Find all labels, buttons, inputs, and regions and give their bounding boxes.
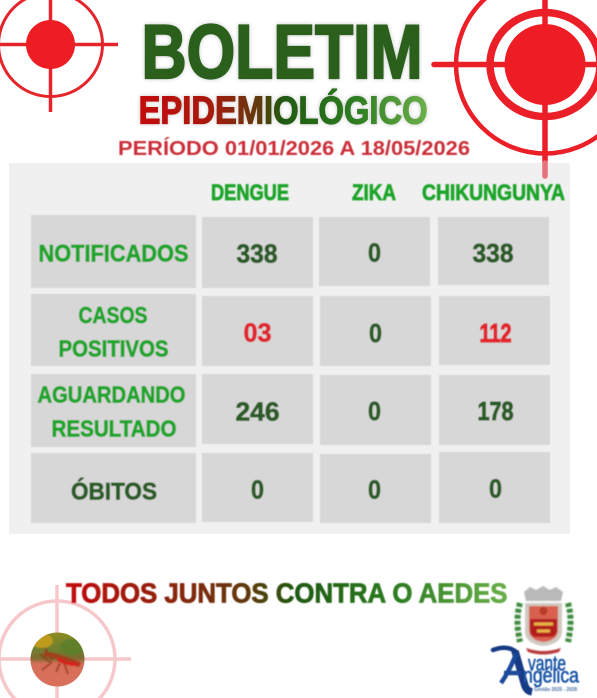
column headers: DENGUE [211, 180, 289, 205]
title: BOLETIM: BOLETIM [142, 10, 422, 95]
row: casos positivos: 03 [244, 318, 272, 348]
row: obitos: 0 [368, 474, 381, 504]
icon: faded target with mosquito [0, 585, 131, 698]
row: notificados: 338 [236, 238, 278, 268]
logo: Avante Angélica: Gestão 2025 - 2028 [534, 687, 577, 693]
footer slogan: TODOS JUNTOS CONTRA O AEDES [66, 578, 508, 609]
row: aguardando resultado: AGUARDANDO [38, 382, 186, 408]
icon: target top left [0, 0, 118, 112]
column headers: ZIKA [352, 180, 396, 205]
row: casos positivos: 112 [480, 318, 512, 348]
title: EPIDEMIOLÓGICO: EPIDEMIOLÓGICO [139, 88, 428, 132]
row: casos positivos [31, 294, 550, 366]
row: casos positivos: POSITIVOS [58, 336, 168, 362]
row: aguardando resultado [31, 374, 550, 447]
period line: PERÍODO 01/01/2026 A 18/05/2026 [118, 137, 470, 160]
row: obitos: 0 [489, 474, 502, 504]
row: notificados [31, 215, 549, 288]
row: aguardando resultado: 0 [368, 396, 381, 426]
row: notificados: 0 [368, 238, 381, 268]
icon: municipal crest [518, 586, 570, 654]
icon: target top right [434, 0, 597, 163]
row: aguardando resultado: 178 [478, 396, 514, 426]
row: notificados: 338 [472, 238, 514, 268]
row: obitos [31, 452, 550, 523]
row: casos positivos: CASOS [78, 302, 148, 328]
row: casos positivos: 0 [369, 318, 382, 348]
logo: Avante Angélica: ngélica [523, 664, 579, 688]
logo: Avante Angélica [493, 648, 579, 693]
row: notificados: NOTIFICADOS [38, 240, 188, 268]
column headers [211, 180, 565, 205]
row: obitos: ÓBITOS [71, 478, 157, 506]
logo: Avante Angélica: vante [528, 652, 566, 676]
row: obitos: 0 [251, 474, 264, 504]
row: aguardando resultado: RESULTADO [52, 416, 176, 442]
panel: data table [9, 163, 570, 534]
row: aguardando resultado: 246 [236, 396, 280, 426]
column headers: CHIKUNGUNYA [422, 180, 565, 205]
